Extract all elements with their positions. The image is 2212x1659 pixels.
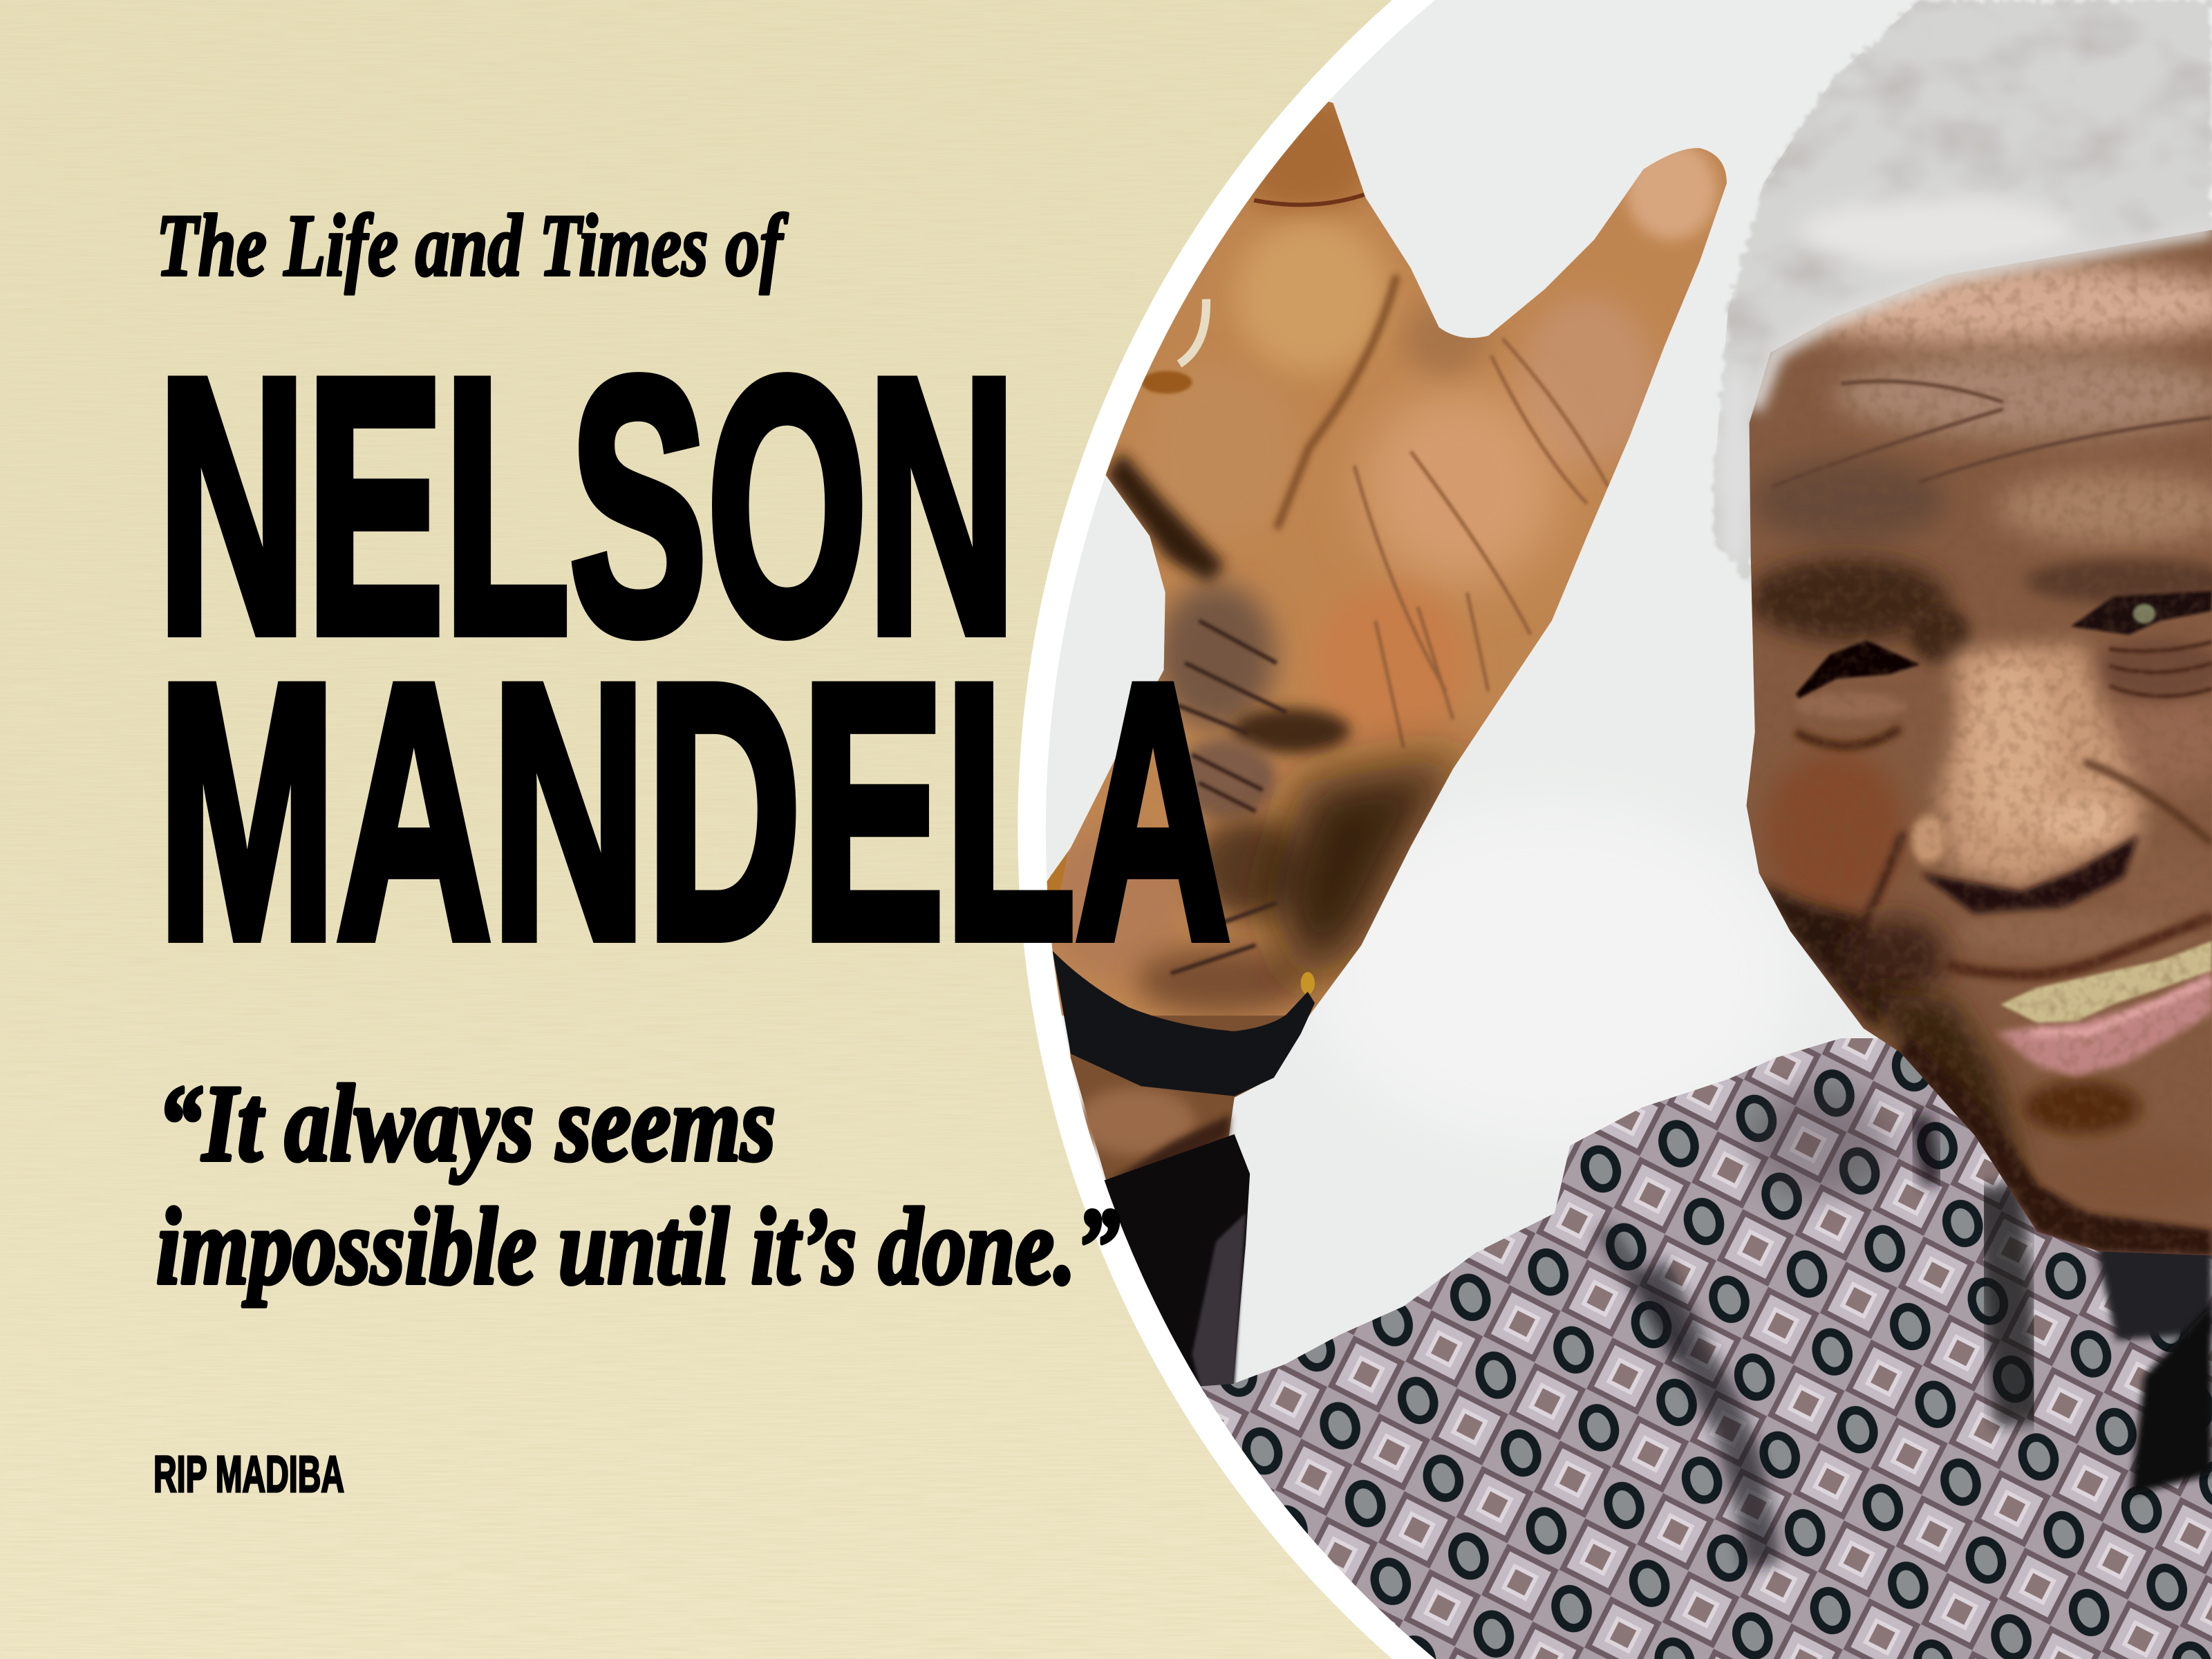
- teeth: [2000, 941, 2212, 1023]
- quote: impossible until it’s done.”: [156, 1186, 1120, 1307]
- hair: [1714, 0, 2212, 592]
- forearm below the watch: [1051, 874, 1285, 1180]
- patterned shirt: [1156, 1037, 2212, 1659]
- subtitle: The Life and Times of: The Life and Times of: [156, 196, 789, 294]
- ring on finger: [1179, 299, 1206, 364]
- upper lip: [1954, 911, 2193, 957]
- lower wrist tones: [1044, 825, 1185, 980]
- eyes: [1796, 641, 1920, 698]
- wristwatch band: [1052, 950, 1315, 1096]
- finger crease: [1254, 195, 1364, 205]
- skin texture: [1742, 226, 2212, 1263]
- right cheek and wrinkles: [2095, 690, 2212, 791]
- main title: first line: NELSON: [158, 304, 1016, 709]
- under-eye left: [1794, 693, 1907, 718]
- lower face: [1866, 989, 2032, 1199]
- brow shadow: [1747, 557, 1949, 642]
- watch clasp: [1301, 972, 1315, 995]
- quote: [156, 1063, 1120, 1307]
- nose: [1938, 645, 2144, 888]
- lower lip: [1996, 971, 2212, 1076]
- black sleeve: [1099, 1134, 1250, 1394]
- white circular ring around photo: [1018, 0, 2212, 1659]
- face: [1742, 226, 2212, 1263]
- raised hand: [973, 84, 1763, 1015]
- quote: “It always seems: [158, 1063, 776, 1184]
- closing tagline: RIP MADIBA: RIP MADIBA: [153, 1445, 344, 1503]
- bracelet: [1047, 851, 1068, 903]
- soft light patch in backdrop: [1312, 804, 1792, 1143]
- panel: circular portrait photo: [968, 0, 2212, 1659]
- shadow under fingers: [1106, 451, 1224, 585]
- sleeve cuff pattern: [1192, 1213, 1246, 1394]
- main title: second line: MANDELA: [158, 610, 1230, 1014]
- mouth line: [1944, 917, 2212, 975]
- nostril shadow: [1920, 835, 2139, 914]
- hairline fringe: [1754, 229, 2212, 409]
- photo content: [973, 0, 2212, 1659]
- left cheek: [1763, 751, 1904, 914]
- forehead creases: [1772, 381, 2212, 487]
